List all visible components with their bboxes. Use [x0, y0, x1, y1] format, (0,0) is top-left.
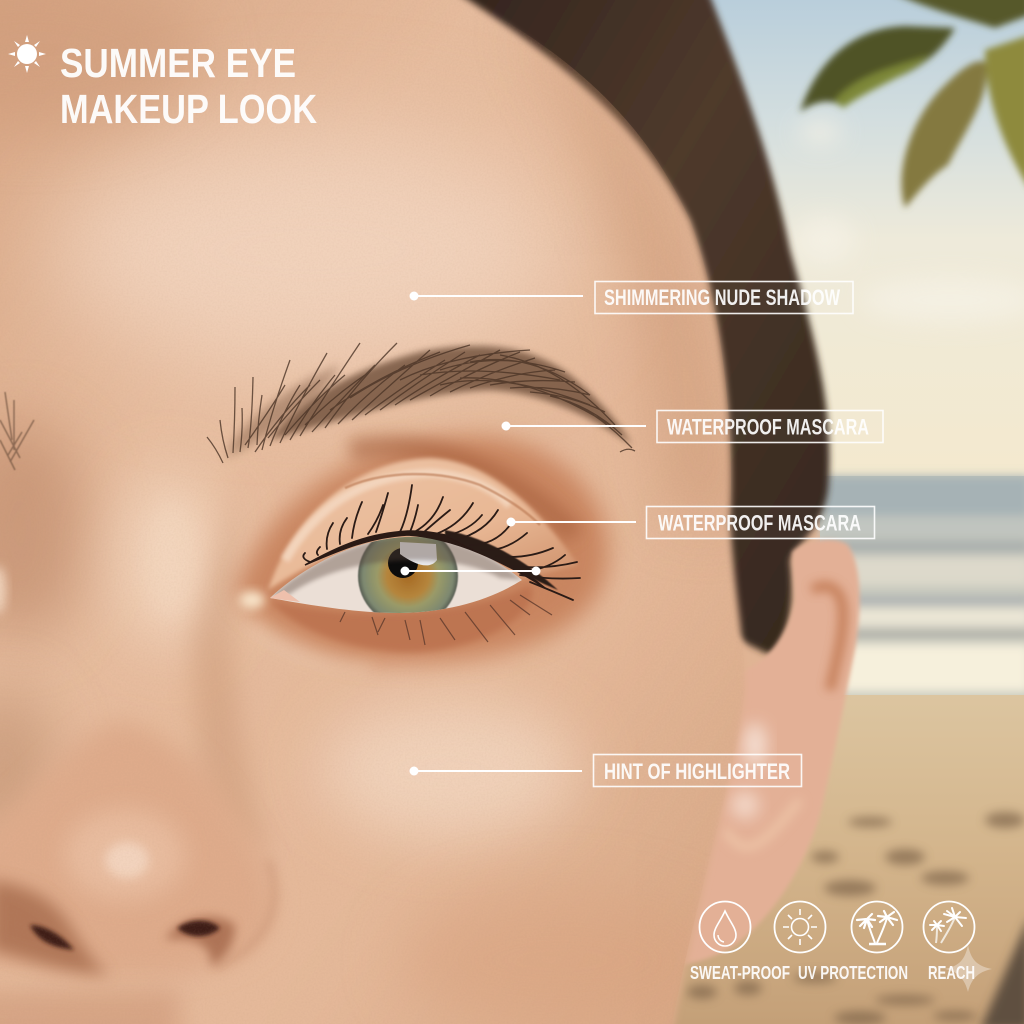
right nostril — [177, 920, 220, 936]
lobe fold — [725, 800, 800, 847]
nose body — [0, 720, 273, 977]
nose tip highlight — [105, 842, 149, 878]
left eyebrow fragment — [0, 392, 34, 470]
skin texture — [0, 0, 745, 1024]
ear rim shade — [812, 586, 843, 690]
inner corner — [270, 590, 300, 602]
callout: shimmering nude shadow — [410, 282, 853, 314]
right alar shadow — [165, 917, 235, 966]
left cheek glint — [0, 566, 6, 614]
callout: hint of highlighter: HINT OF HIGHLIGHTER — [604, 759, 790, 784]
benefit labels: UV PROTECTION — [798, 963, 908, 983]
hair — [420, 0, 829, 655]
icon: sun — [8, 35, 46, 73]
left nostril shadow — [0, 880, 110, 975]
left side shadow — [0, 420, 90, 640]
icon: water drop — [700, 902, 750, 952]
lobe glow — [731, 791, 759, 819]
brow hairs — [207, 343, 635, 463]
lash clump — [445, 530, 558, 590]
icon: palm trees 2 — [924, 902, 974, 952]
eye white — [270, 537, 522, 613]
callout: waterproof mascara upper — [502, 410, 883, 442]
lid shadow — [270, 537, 522, 598]
catchlight — [400, 542, 437, 565]
sand — [660, 695, 1024, 1024]
callout: shimmering nude shadow: SHIMMERING NUDE SHADOW — [604, 285, 840, 310]
benefit labels — [690, 963, 975, 983]
base skin — [0, 0, 745, 1024]
inner corner highlight — [239, 591, 265, 609]
eyeball detail — [272, 536, 522, 613]
eye makeup and eye — [235, 436, 608, 668]
nose glow — [65, 810, 185, 900]
title text: SUMMER EYE — [60, 40, 296, 86]
side of nose dark — [0, 685, 55, 855]
nose side shadow — [186, 529, 261, 831]
brow body left — [225, 365, 340, 458]
pupil — [388, 548, 418, 578]
nose alar edge — [215, 860, 274, 968]
cheek warm — [430, 915, 578, 993]
under-eye highlight — [320, 700, 580, 840]
title text: MAKEUP LOOK — [60, 86, 317, 132]
ear — [670, 540, 860, 965]
upper lashes — [303, 485, 580, 600]
benefits row — [690, 902, 975, 983]
lower lashes — [340, 595, 552, 645]
sparkle watermark — [945, 945, 992, 992]
ear concha highlight — [743, 723, 767, 767]
icon: palm trees — [852, 902, 902, 952]
title block — [8, 35, 317, 132]
beach background — [660, 0, 1024, 1024]
clouds — [795, 120, 1024, 322]
lid — [268, 458, 578, 590]
under-eye shimmer — [250, 625, 370, 668]
lower lid — [270, 585, 532, 652]
left nostril — [30, 925, 74, 950]
nose bridge core — [146, 500, 198, 620]
benefit labels: SWEAT-PROOF — [690, 963, 790, 983]
icon: sun — [774, 902, 826, 952]
iris — [357, 536, 459, 613]
callout: waterproof mascara lower — [506, 506, 874, 538]
callout: hint of highlighter — [410, 754, 802, 786]
sky — [690, 0, 1024, 480]
eyeshadow wash — [235, 436, 608, 663]
dark shadow bottom right — [980, 915, 1024, 1024]
waves — [820, 476, 1024, 692]
callout line: iris to lash — [400, 566, 540, 576]
upper lash line — [305, 531, 545, 588]
ear outer — [670, 540, 860, 965]
upper lip shade — [0, 990, 180, 1024]
outer crease shadow — [350, 447, 575, 535]
lid fold — [345, 474, 540, 525]
palm tree — [800, 0, 1024, 208]
sea — [820, 476, 1024, 698]
forehead highlight — [50, 130, 570, 370]
footprints — [687, 812, 1024, 1024]
lid shimmer — [285, 473, 510, 560]
callout: waterproof mascara lower: WATERPROOF MASCARA — [658, 510, 861, 536]
main eyebrow — [207, 343, 635, 463]
benefit labels: REACH — [928, 963, 975, 983]
temple shadow — [520, 20, 740, 520]
brow body — [270, 346, 632, 445]
top-left shade — [0, 4, 186, 122]
face skin — [0, 0, 745, 1024]
callout: waterproof mascara upper: WATERPROOF MASCARA — [667, 414, 869, 440]
nose bridge highlight — [115, 470, 225, 650]
